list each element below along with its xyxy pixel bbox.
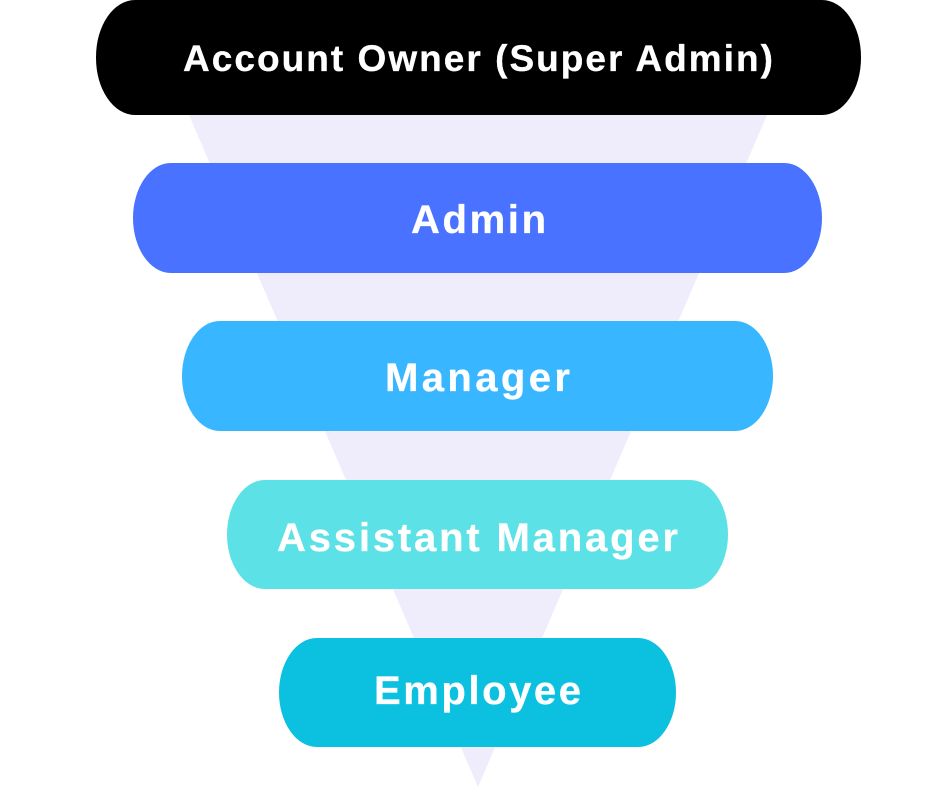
tier: Employee: Employee	[374, 669, 581, 713]
funnel background triangle	[189, 115, 767, 787]
tier: Admin: Admin	[411, 198, 546, 242]
tier: Assistant Manager	[227, 480, 728, 589]
tier: Assistant Manager: Assistant Manager	[277, 516, 678, 560]
tier: Employee	[279, 638, 676, 747]
tier: Manager	[182, 321, 773, 431]
tier: Manager: Manager	[385, 356, 570, 400]
tier: Account Owner (Super Admin): Account Owner (Super Admin)	[183, 38, 773, 79]
tier: Admin	[133, 163, 822, 273]
tier: Account Owner (Super Admin)	[96, 0, 861, 115]
